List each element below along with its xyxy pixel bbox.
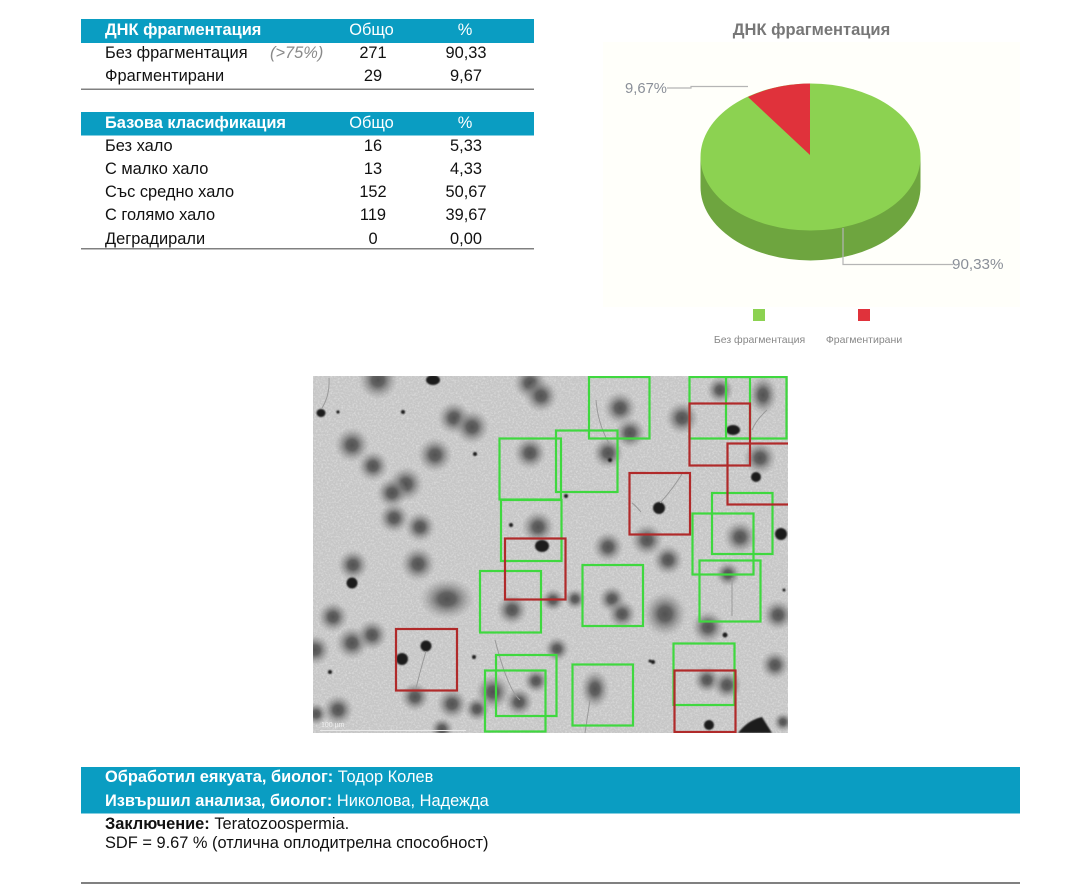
conclusion text: SDF = 9.67 % (отлична оплодитрелна способност)	[105, 834, 488, 852]
row: fragmented: Фрагментирани	[105, 67, 224, 85]
table: basic classification	[81, 112, 534, 250]
pie chart	[603, 42, 1020, 307]
leader line and label 90,33%	[843, 228, 1004, 273]
row: no fragmentation: Без фрагментация	[105, 44, 248, 62]
leader line and label 90,33%: 90,33%	[952, 256, 1004, 273]
slice: not fragmented 90.33%	[700, 84, 920, 230]
table header: Общо	[349, 114, 394, 132]
green detection boxes	[480, 377, 786, 732]
row: small halo: С малко хало	[105, 160, 208, 178]
table header: %	[458, 21, 472, 39]
table header	[81, 112, 534, 136]
row: small halo: 13	[364, 160, 382, 178]
row: degraded: Деградирали	[105, 230, 205, 248]
conclusion text	[105, 815, 488, 852]
legend	[714, 309, 902, 346]
row: large halo: 119	[360, 206, 386, 224]
scale label: 100 µm	[321, 722, 345, 729]
table header: ДНК фрагментация	[105, 21, 261, 39]
row: no halo: Без хало	[105, 137, 173, 155]
row: no fragmentation: (>75%)	[270, 44, 323, 62]
row: degraded	[105, 230, 482, 248]
row: no halo: 16	[364, 137, 382, 155]
row: no fragmentation: 90,33	[445, 44, 487, 62]
row: large halo: С голямо хало	[105, 206, 215, 224]
dark sperm heads	[316, 375, 787, 733]
row: small halo	[105, 160, 482, 178]
row: small halo: 4,33	[450, 160, 482, 178]
row: medium halo: Със средно хало	[105, 183, 234, 201]
table header: Общо	[349, 21, 394, 39]
sperm tails	[322, 378, 767, 733]
red detection boxes	[396, 404, 790, 732]
row: degraded: 0	[368, 230, 378, 248]
footer bar: staff	[81, 767, 1020, 814]
leader line and label 9,67%: 9,67%	[625, 81, 667, 97]
row: fragmented: 29	[364, 67, 382, 85]
table header	[81, 19, 534, 43]
legend item: fragmented: Фрагментирани	[826, 334, 902, 346]
row: medium halo: 50,67	[445, 183, 487, 201]
sperm halos	[313, 376, 788, 733]
row: no fragmentation: 271	[359, 44, 387, 62]
chart title: ДНК фрагментация	[733, 21, 890, 39]
row: no halo	[105, 137, 482, 155]
row: medium halo: 152	[359, 183, 387, 201]
row: fragmented	[105, 67, 482, 85]
leader line and label 9,67%	[625, 81, 748, 97]
slice: fragmented 9.67%	[748, 84, 810, 155]
conclusion text: Заключение: Teratozoospermia.	[105, 815, 349, 833]
row: large halo: 39,67	[445, 206, 487, 224]
row: no halo: 5,33	[450, 137, 482, 155]
micrograph with detection boxes	[313, 376, 788, 733]
row: large halo	[105, 206, 487, 224]
legend item: fragmented	[826, 309, 902, 346]
processed by: Обработил еякуата, биолог: Тодор Колев	[105, 768, 433, 786]
analysed by: Извършил анализа, биолог: Николова, Надежда	[105, 792, 490, 810]
row: fragmented: 9,67	[450, 67, 482, 85]
legend item: not fragmented: Без фрагментация	[714, 334, 805, 346]
table header: Базова класификация	[105, 114, 286, 132]
pie side	[700, 157, 920, 260]
row: no fragmentation	[105, 44, 487, 62]
row: medium halo	[105, 183, 487, 201]
legend item: not fragmented	[714, 309, 805, 346]
table header: %	[458, 114, 472, 132]
table: DNA fragmentation	[81, 19, 534, 90]
row: degraded: 0,00	[450, 230, 482, 248]
